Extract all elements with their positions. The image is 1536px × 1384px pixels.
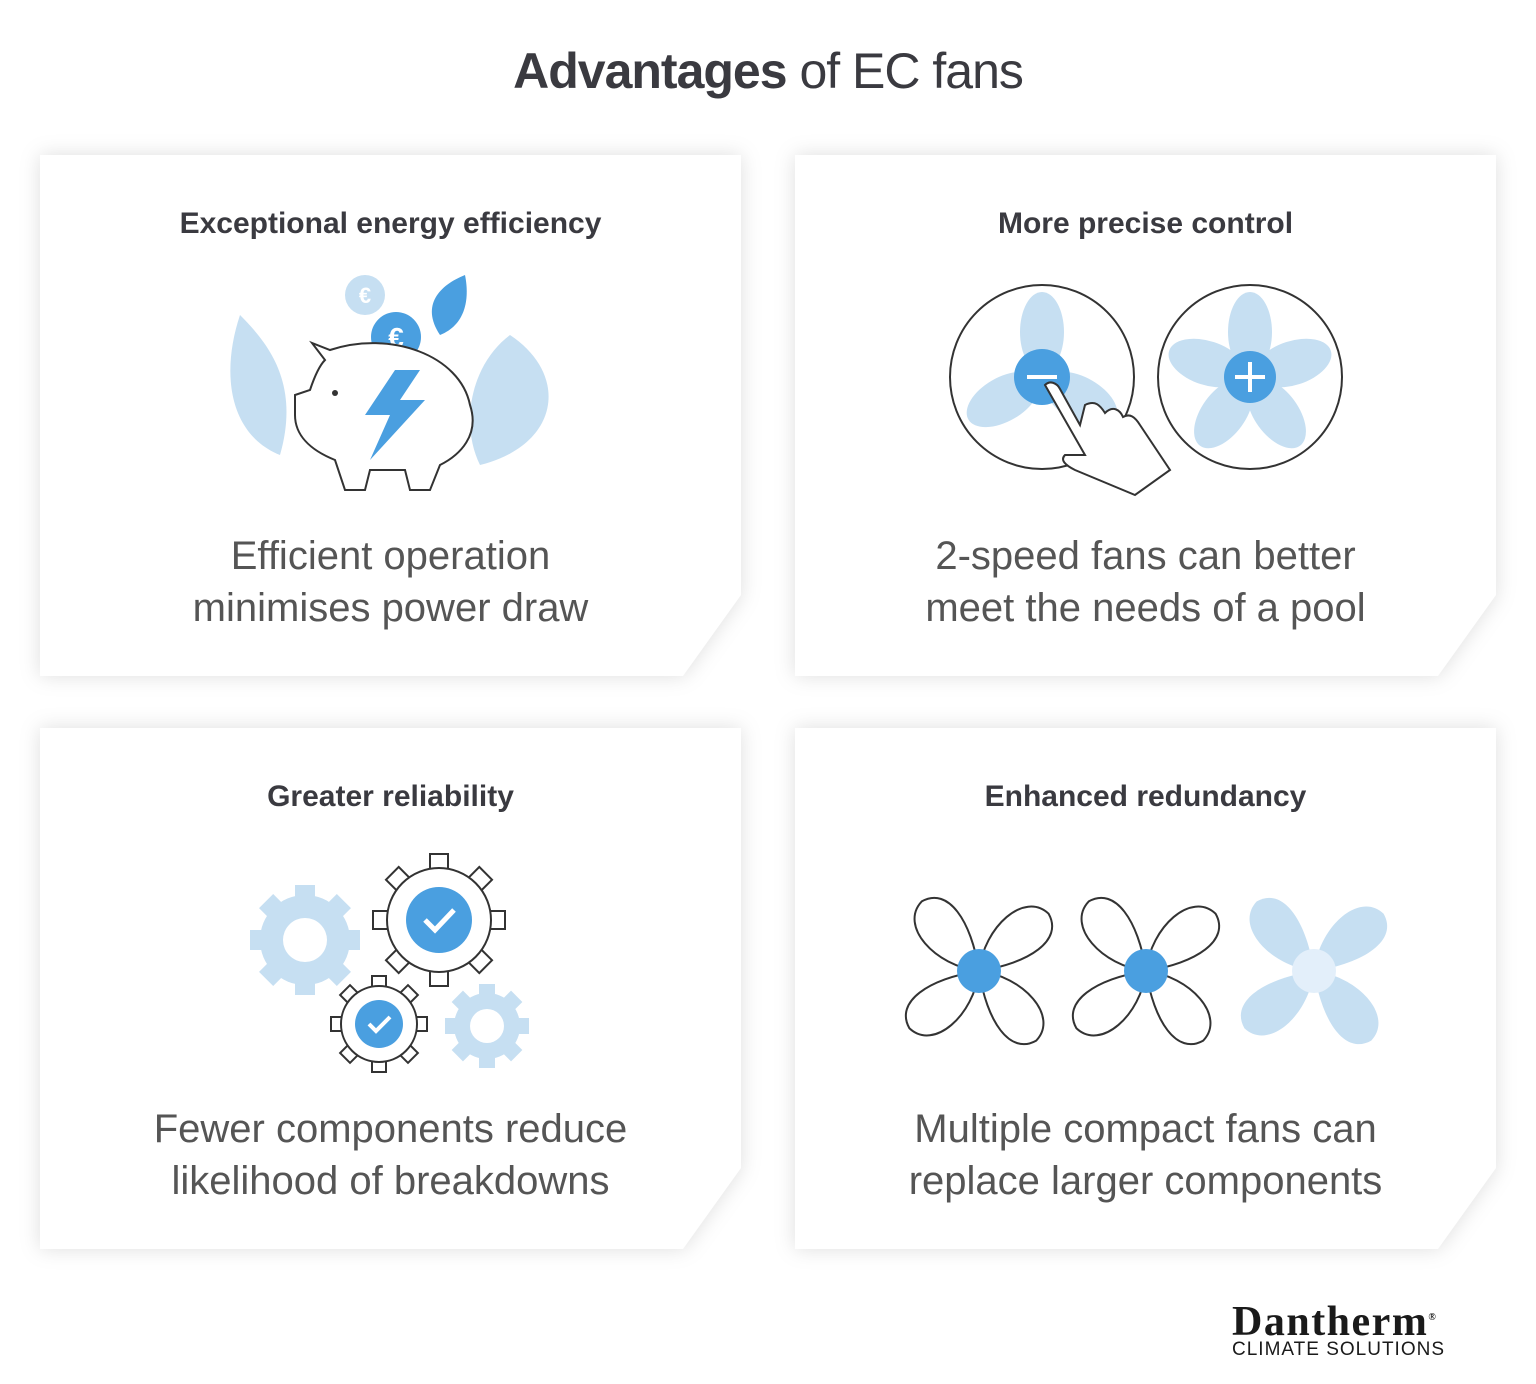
heading: Greater reliability [267, 780, 514, 813]
icon: piggy bank [230, 275, 549, 491]
panel: energy efficiency [34, 148, 748, 682]
title: Advantages of EC fans [513, 43, 1023, 99]
body text: Fewer components reduce [154, 1107, 627, 1151]
heading: Exceptional energy efficiency [180, 207, 601, 240]
body text: meet the needs of a pool [925, 586, 1366, 630]
panel: reliability [34, 722, 748, 1256]
icon: three fans [904, 896, 1388, 1046]
body text: minimises power draw [193, 586, 588, 630]
icon: piggy bank: € [359, 283, 371, 308]
body text: likelihood of breakdowns [171, 1159, 610, 1203]
body text: Efficient operation [231, 534, 550, 578]
body text: Multiple compact fans can [914, 1107, 1377, 1151]
body text: 2-speed fans can better [935, 534, 1356, 578]
logo: CLIMATE SOLUTIONS [1232, 1339, 1445, 1360]
icon: gears [250, 853, 529, 1073]
panel: precise control [788, 148, 1502, 682]
panel: redundancy [788, 722, 1502, 1256]
logo: Dantherm® [1232, 1299, 1437, 1345]
body text [911, 1113, 1381, 1202]
body text: replace larger components [909, 1159, 1382, 1203]
body text [195, 540, 588, 630]
body text [928, 540, 1363, 630]
icon: piggy bank: € [388, 322, 404, 353]
heading: Enhanced redundancy [985, 780, 1306, 813]
icon: fans with buttons [949, 284, 1343, 496]
body text [157, 1113, 626, 1194]
heading: More precise control [998, 207, 1293, 240]
